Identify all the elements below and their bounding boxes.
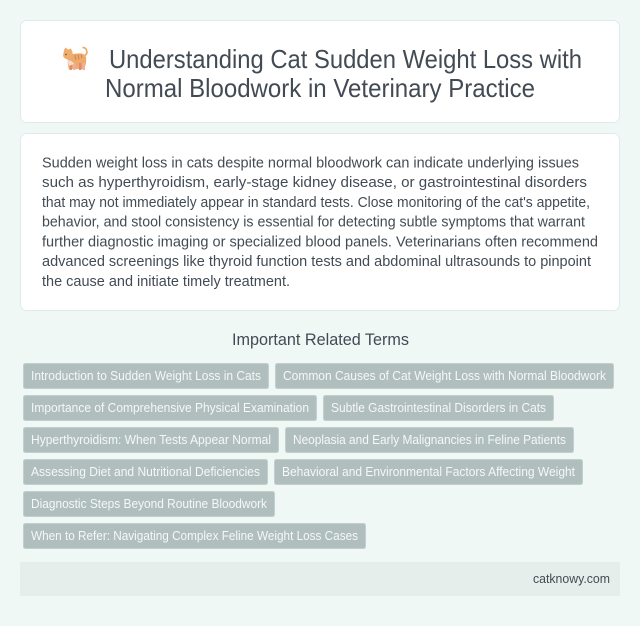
tag: Diagnostic Steps Beyond Routine Bloodwork (31, 497, 268, 511)
footer (20, 562, 620, 596)
tag: Importance of Comprehensive Physical Examination (31, 401, 309, 415)
tag (24, 460, 268, 484)
tag: Assessing Diet and Nutritional Deficiencies (31, 465, 260, 479)
tag: Hyperthyroidism: When Tests Appear Normal (31, 433, 271, 447)
title: Understanding Cat Sudden Weight Loss with (109, 44, 582, 74)
tag (24, 396, 316, 420)
tag: Subtle Gastrointestinal Disorders in Cats (331, 401, 546, 415)
tags: related terms (24, 364, 614, 548)
tag (24, 524, 366, 548)
tag (24, 364, 268, 388)
title (105, 44, 582, 103)
summary text: that may not immediately appear in standard tests. Close monitoring of the cat's appetite, (42, 194, 590, 211)
footer: catknowy.com (533, 571, 610, 586)
tag: Neoplasia and Early Malignancies in Feline Patients (293, 433, 566, 447)
summary text: Sudden weight loss in cats despite normal bloodwork can indicate underlying issues (42, 154, 579, 172)
summary text: such as hyperthyroidism, early-stage kidney disease, or gastrointestinal disorders (42, 174, 587, 191)
summary text (42, 154, 598, 290)
title: Normal Bloodwork in Veterinary Practice (105, 73, 535, 103)
tag (24, 492, 274, 516)
tag (274, 460, 582, 484)
summary text: advanced screenings like thyroid function tests and abdominal ultrasounds to pinpoint (42, 253, 592, 270)
summary text: behavior, and stool consistency is essential for detecting subtle symptoms that warrant (42, 214, 586, 230)
tag (324, 396, 554, 420)
tag: Behavioral and Environmental Factors Affecting Weight (282, 465, 576, 479)
summary text: further diagnostic imaging or specialized blood panels. Veterinarians often recommend (42, 234, 598, 250)
tag (286, 428, 574, 452)
panel: title card (20, 20, 620, 122)
panel: summary card (20, 134, 620, 310)
tag: Common Causes of Cat Weight Loss with Normal Bloodwork (283, 369, 607, 383)
tag (276, 364, 614, 388)
icon: cat (63, 48, 87, 70)
tag: When to Refer: Navigating Complex Feline Weight Loss Cases (31, 529, 358, 543)
summary text: the cause and initiate timely treatment. (42, 273, 290, 290)
tag (24, 428, 278, 452)
heading: related terms: Important Related Terms (232, 331, 409, 349)
tag: Introduction to Sudden Weight Loss in Cats (31, 369, 261, 383)
